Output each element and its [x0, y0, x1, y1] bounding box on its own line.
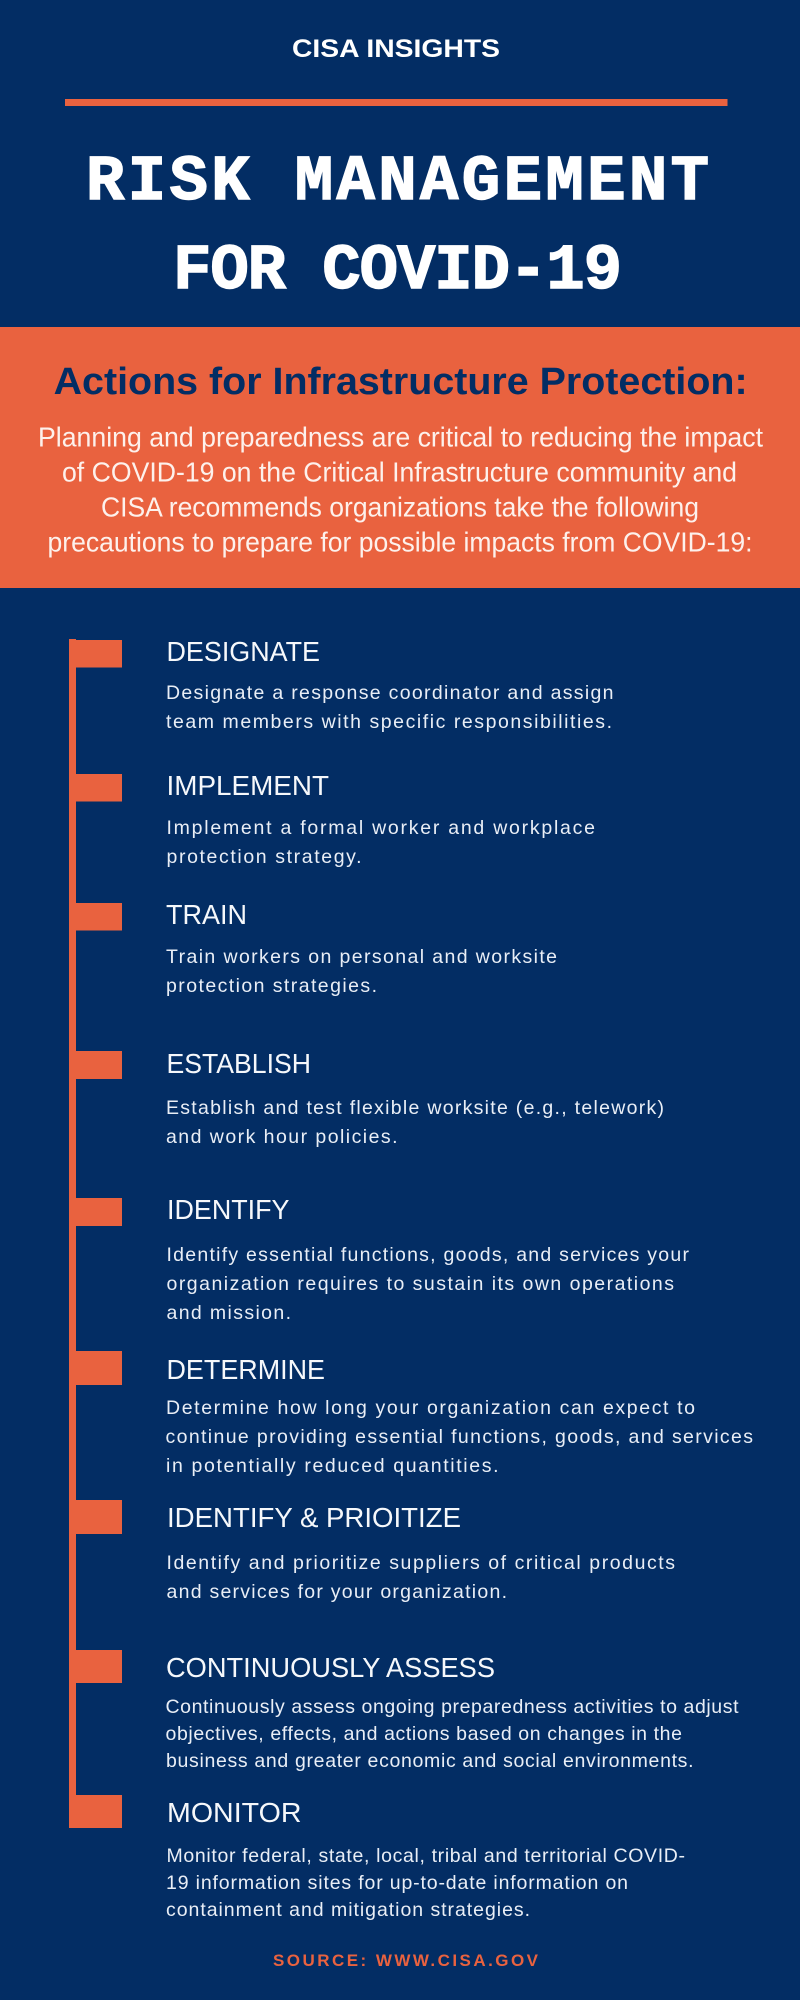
- step text: team members with specific responsibilities.: [166, 711, 612, 733]
- step text: and work hour policies.: [166, 1126, 398, 1148]
- step text: Continuously assess ongoing preparedness activities to adjust: [166, 1696, 739, 1718]
- step text: Determine how long your organization can expect to: [166, 1397, 695, 1419]
- step text: [166, 1244, 690, 1324]
- step heading: DETERMINE: [166, 1354, 325, 1385]
- step text: [166, 946, 557, 997]
- step text: Implement a formal worker and workplace: [166, 817, 595, 839]
- step text: Train workers on personal and worksite: [166, 946, 557, 968]
- step text: [166, 682, 614, 733]
- marker: [69, 640, 122, 668]
- marker: [69, 1351, 122, 1385]
- step text: and mission.: [166, 1302, 291, 1324]
- step text: [166, 1097, 664, 1148]
- step: continuously assess: [69, 1650, 739, 1772]
- step: train: [69, 899, 557, 997]
- step: establish: [69, 1048, 664, 1148]
- step text: continue providing essential functions, goods, and services: [166, 1426, 753, 1448]
- step heading: MONITOR: [167, 1797, 302, 1828]
- step heading: CONTINUOUSLY ASSESS: [166, 1652, 495, 1683]
- step text: objectives, effects, and actions based on changes in the: [166, 1723, 682, 1745]
- marker: [69, 1795, 122, 1828]
- intro paragraph: Planning and preparedness are critical to reducing the impact: [38, 422, 763, 453]
- step text: [166, 1696, 739, 1772]
- step: determine: [69, 1351, 753, 1477]
- eyebrow: CISA Insights: CISA INSIGHTS: [292, 35, 500, 63]
- marker: [69, 903, 122, 930]
- step: implement: [69, 770, 595, 868]
- section heading: Actions for Infrastructure Protection:: [54, 361, 748, 403]
- step heading: IMPLEMENT: [166, 770, 329, 801]
- step text: [166, 1552, 675, 1603]
- intro paragraph: CISA recommends organizations take the following: [101, 492, 699, 523]
- intro paragraph: [38, 422, 763, 558]
- step text: Monitor federal, state, local, tribal and territorial COVID-: [166, 1845, 685, 1867]
- marker: [69, 1650, 122, 1683]
- step text: [166, 817, 595, 868]
- step text: Identify and prioritize suppliers of critical products: [166, 1552, 675, 1574]
- step: identify: [69, 1194, 690, 1324]
- title: [86, 147, 709, 308]
- intro paragraph: of COVID-19 on the Critical Infrastructure community and: [62, 456, 737, 488]
- step text: Establish and test flexible worksite (e.g., telework): [166, 1097, 664, 1119]
- marker: [69, 774, 122, 802]
- step text: and services for your organization.: [166, 1581, 507, 1603]
- step: designate: [69, 636, 614, 733]
- step heading: DESIGNATE: [166, 636, 320, 667]
- header panel: [0, 0, 800, 327]
- step text: in potentially reduced quantities.: [166, 1455, 499, 1477]
- intro paragraph: precautions to prepare for possible impacts from COVID-19:: [48, 526, 752, 558]
- marker: [69, 1051, 122, 1079]
- step text: [166, 1397, 753, 1477]
- marker: [69, 1500, 122, 1534]
- step heading: IDENTIFY & PRIOITIZE: [167, 1502, 461, 1533]
- title: FOR COVID-19: [173, 236, 622, 308]
- source line: SOURCE: WWW.CISA.GOV: [273, 1951, 539, 1970]
- step text: business and greater economic and social environments.: [166, 1750, 694, 1772]
- step heading: ESTABLISH: [166, 1048, 311, 1079]
- step heading: TRAIN: [166, 899, 247, 930]
- marker: [69, 1198, 122, 1226]
- step heading: IDENTIFY: [167, 1194, 290, 1225]
- step: monitor: [69, 1795, 685, 1921]
- timeline spine: [69, 639, 76, 1828]
- step text: containment and mitigation strategies.: [166, 1899, 530, 1921]
- step text: 19 information sites for up-to-date information on: [166, 1872, 628, 1894]
- panel: actions for infrastructure protection: [0, 327, 800, 588]
- step text: protection strategies.: [166, 975, 377, 997]
- step text: protection strategy.: [166, 846, 362, 868]
- step text: Identify essential functions, goods, and services your: [166, 1244, 690, 1266]
- step text: organization requires to sustain its own operations: [166, 1273, 674, 1295]
- step text: [166, 1845, 685, 1921]
- header rule: [65, 99, 728, 106]
- step text: Designate a response coordinator and assign: [166, 682, 614, 704]
- step: identify and prioritize: [69, 1500, 675, 1603]
- title: RISK MANAGEMENT: [86, 147, 709, 219]
